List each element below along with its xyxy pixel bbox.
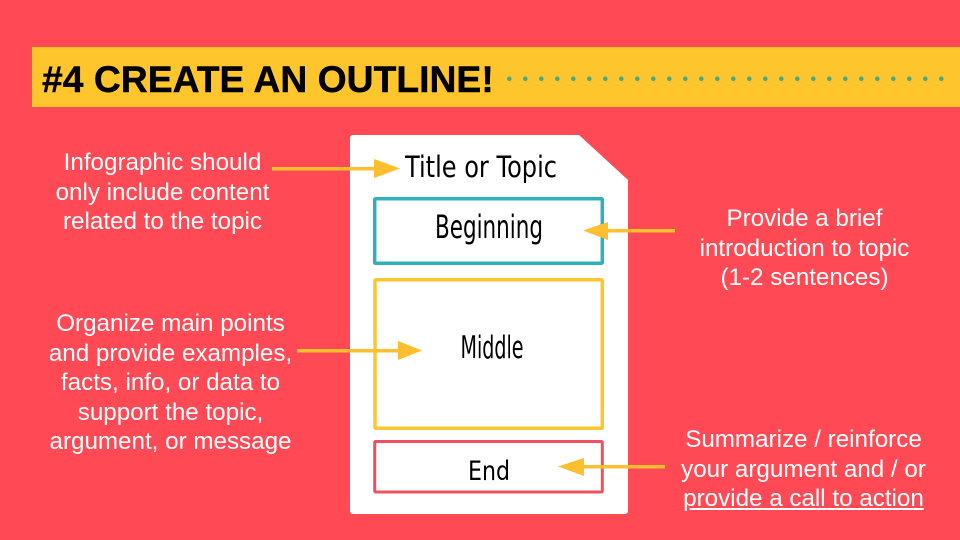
note: introduction: (1-2 sentences) (720, 264, 889, 291)
note: introduction: introduction to topic (700, 234, 909, 262)
note: content related to topic: only include content (56, 178, 269, 206)
dotted divider (507, 76, 944, 82)
arrow: to title (272, 159, 400, 178)
note: content related to topic (56, 149, 270, 235)
note: conclusion: your argument and / or (681, 456, 926, 482)
note: middle content: facts, info, or data to (61, 369, 280, 396)
note: middle content: support the topic, (78, 398, 263, 426)
note: middle content: Organize main points (56, 310, 285, 337)
end label: End (468, 456, 510, 487)
note: conclusion: provide a call to action (683, 485, 924, 512)
note: content related to topic: Infographic should (64, 149, 261, 176)
note: introduction: Provide a brief (727, 205, 882, 232)
arrow: to end (558, 458, 665, 476)
arrow: to beginning (583, 222, 675, 240)
note: middle content: argument, or message (50, 428, 292, 455)
title: #4 CREATE AN OUTLINE! (42, 58, 494, 100)
note: content related to topic: related to the topic (63, 208, 262, 235)
document page (350, 135, 628, 514)
title banner (32, 47, 960, 107)
handwritten title: Title or Topic (404, 150, 557, 184)
arrow: to middle (297, 341, 422, 360)
note: introduction (700, 205, 909, 291)
beginning box (375, 199, 602, 263)
note: conclusion (681, 426, 926, 512)
beginning label: Beginning (435, 208, 543, 246)
note: middle content: and provide examples, (49, 340, 292, 366)
middle box (375, 280, 602, 428)
note: middle content (49, 310, 292, 455)
middle label: Middle (460, 330, 524, 366)
note: conclusion: Summarize / reinforce (685, 426, 922, 453)
end box (375, 442, 602, 492)
